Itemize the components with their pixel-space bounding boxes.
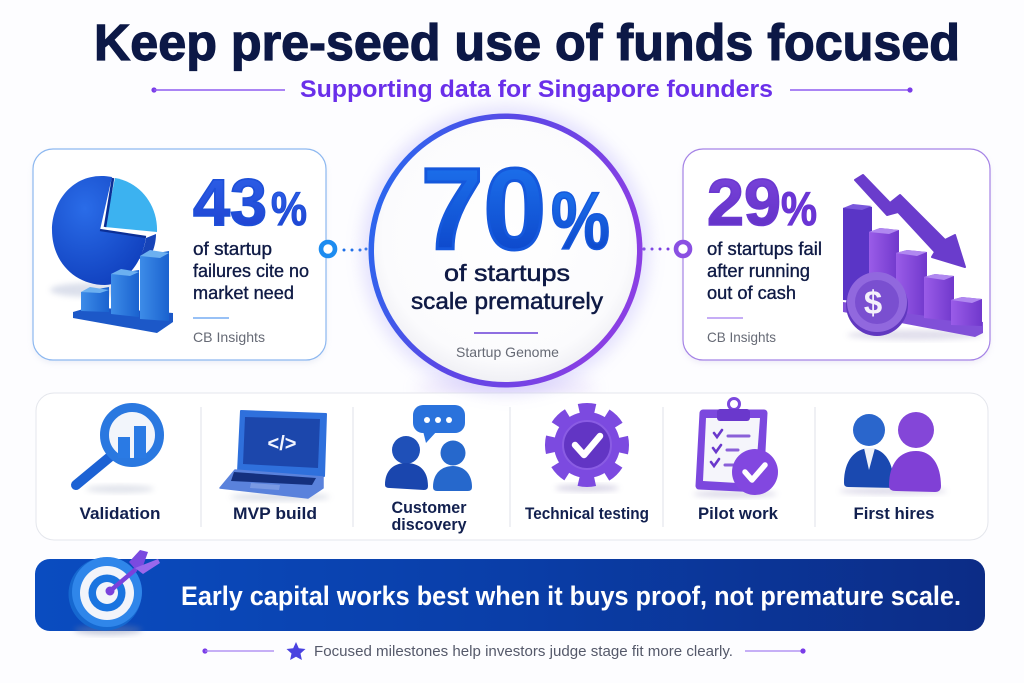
stat description: after running <box>707 261 810 281</box>
subtitle with rules: Supporting data for Singapore founders <box>300 76 773 103</box>
item: first hires: First hires <box>854 505 934 523</box>
item: pilot work: Pilot work <box>698 505 779 523</box>
icon: star <box>286 642 306 660</box>
stat number 29% <box>707 165 817 239</box>
stat number 70% <box>421 144 610 274</box>
panel: task strip <box>36 378 988 540</box>
item: MVP build <box>220 411 330 523</box>
item: customer discovery: Customer <box>392 499 467 517</box>
stat description: out of cash <box>707 283 796 303</box>
banner message: Early capital works best when it buys proof, not premature scale. <box>181 581 961 611</box>
footer note <box>202 642 806 660</box>
stat description: of startups <box>444 260 570 286</box>
item: MVP build: MVP build <box>233 505 317 523</box>
stat description: failures cite no <box>193 261 309 281</box>
item: validation: Validation <box>80 505 160 523</box>
item: customer discovery <box>385 405 472 534</box>
banner <box>35 550 985 635</box>
stat description: scale prematurely <box>411 288 604 314</box>
stat description <box>411 260 604 314</box>
panel: 29% stat <box>683 149 990 363</box>
center circle: 70% <box>362 106 650 394</box>
stat description: of startups fail <box>707 239 822 259</box>
item: first hires <box>839 412 947 523</box>
stat number 29%: 29 <box>707 165 781 239</box>
stat number 43% <box>193 165 307 239</box>
stat description <box>707 239 822 303</box>
icon: falling bars, arrow and coin <box>843 175 983 340</box>
stat number 70%: % <box>551 176 610 267</box>
connector: left <box>321 242 368 256</box>
item: validation <box>76 408 160 523</box>
stat number 43%: 43 <box>193 165 267 239</box>
source: CB Insights <box>193 329 265 345</box>
source: CB Insights <box>707 329 776 345</box>
source: Startup Genome <box>456 344 559 360</box>
title: Keep pre-seed use of funds focused <box>94 14 960 71</box>
icon: pie and bar chart <box>50 176 173 333</box>
stat description <box>193 239 309 303</box>
icon: target with arrow <box>68 550 160 635</box>
item: technical testing: Technical testing <box>525 505 649 523</box>
footer note: Focused milestones help investors judge stage fit more clearly. <box>314 644 733 660</box>
panel: 43% stat <box>33 149 326 363</box>
item: technical testing <box>525 402 649 523</box>
item: pilot work <box>693 398 779 523</box>
item: MVP build: </> <box>268 433 296 455</box>
stat description: market need <box>193 283 294 303</box>
stat number 43%: % <box>271 182 307 235</box>
stat number 70%: 70 <box>421 144 546 274</box>
connector: right <box>642 242 690 256</box>
icon: falling bars, arrow and coin: $ <box>864 284 882 321</box>
item: customer discovery: discovery <box>392 516 467 534</box>
stat description: of startup <box>193 239 272 259</box>
subtitle with rules <box>151 76 913 103</box>
stat number 29%: % <box>781 182 817 235</box>
